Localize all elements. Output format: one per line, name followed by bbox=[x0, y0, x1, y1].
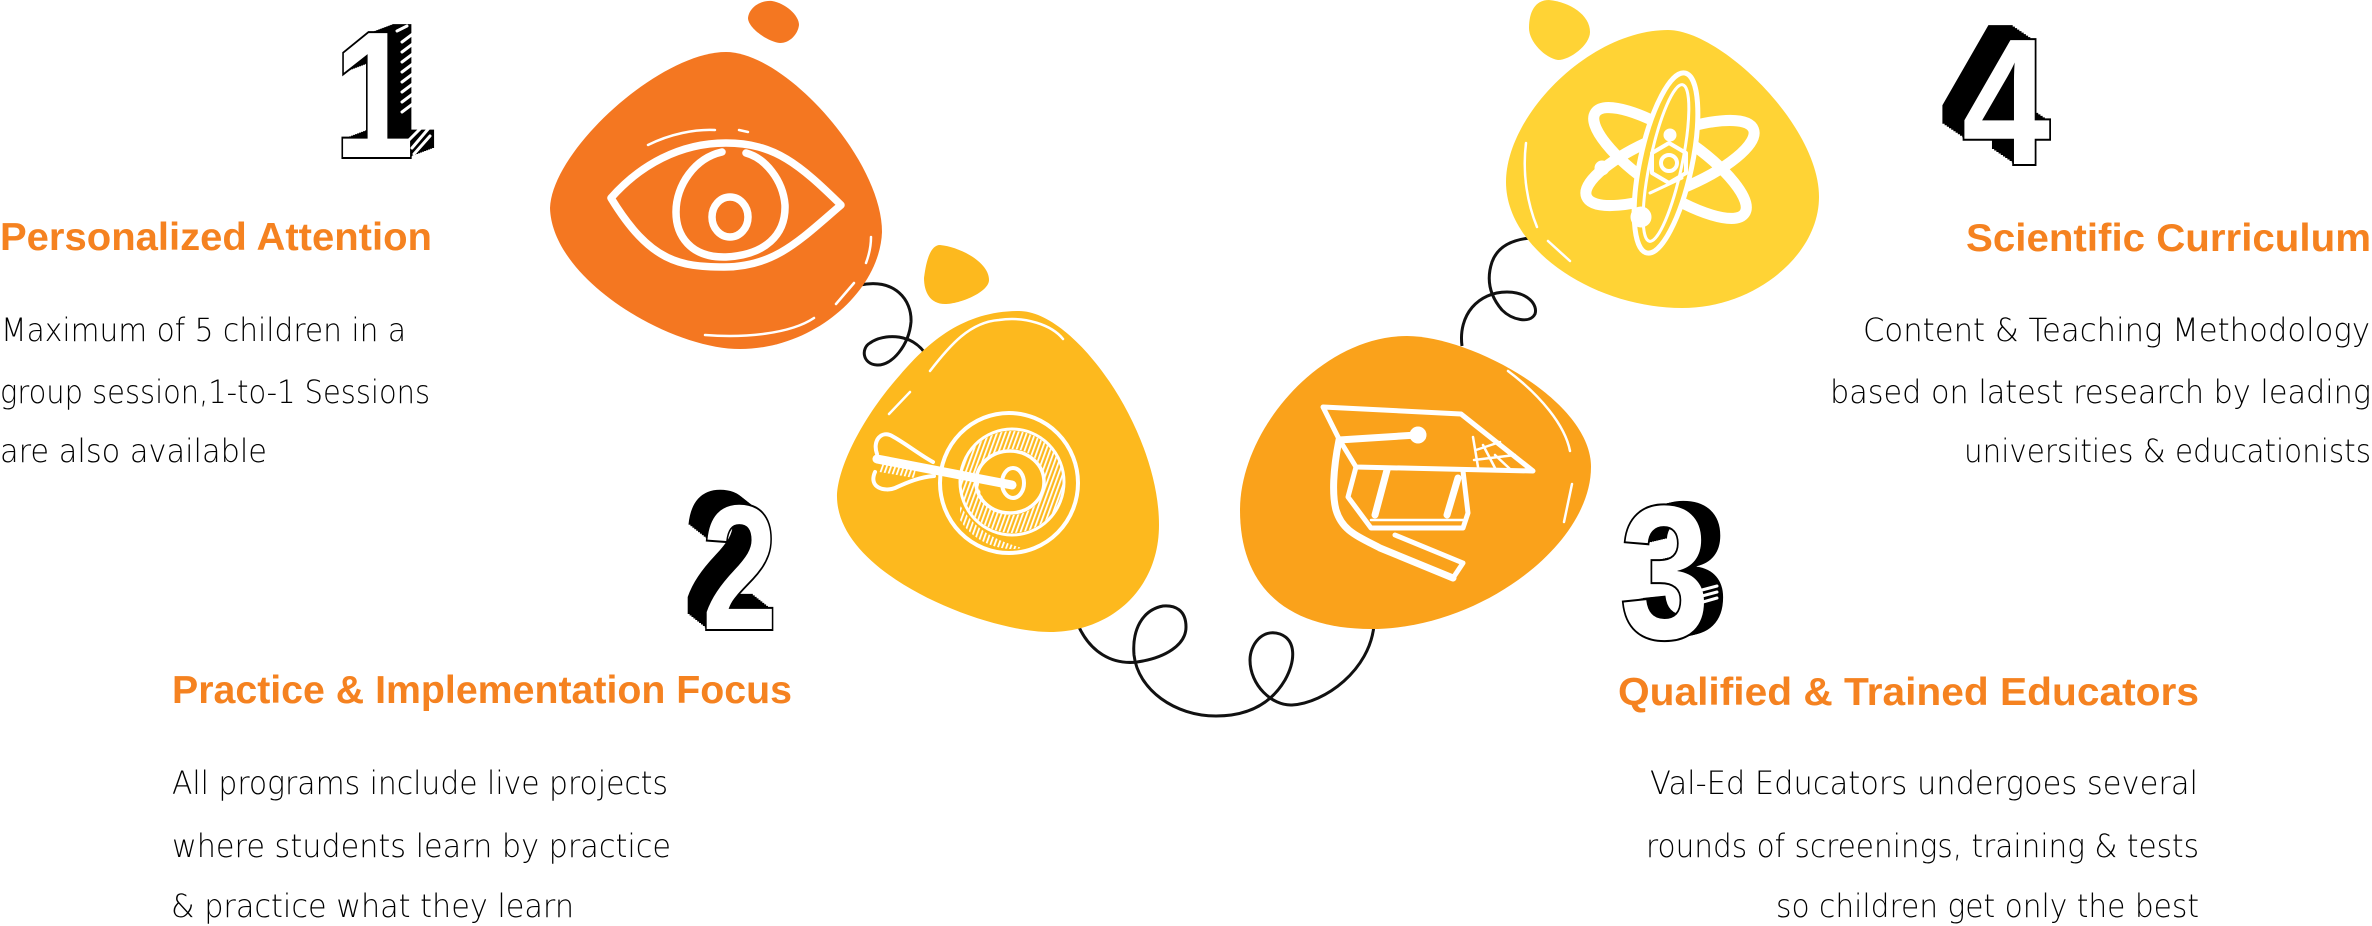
panel: scientific curriculum bbox=[1830, 217, 2371, 470]
body text bbox=[1830, 311, 2371, 470]
highlights bbox=[1508, 371, 1572, 522]
balloon 4: yellow with atom bbox=[1506, 0, 1819, 308]
deep amber blob bbox=[1240, 336, 1591, 629]
body text: & practice what they learn bbox=[171, 887, 574, 925]
body text bbox=[0, 311, 430, 470]
highlights bbox=[889, 319, 1063, 414]
icon: target with arrow bbox=[873, 413, 1078, 553]
body text: are also available bbox=[0, 432, 267, 470]
body text: so children get only the best bbox=[1776, 887, 2199, 925]
amber blob bbox=[837, 311, 1159, 632]
panel: qualified and trained educators bbox=[1618, 671, 2199, 925]
connector: balloon 3 to balloon 4 bbox=[1461, 238, 1536, 346]
heading: Qualified & Trained Educators bbox=[1618, 671, 2199, 714]
number 1: 1 bbox=[334, 0, 414, 196]
heading: Scientific Curriculum bbox=[1966, 217, 2371, 260]
small yellow blob bbox=[1529, 0, 1590, 60]
panel: practice and implementation focus bbox=[171, 669, 792, 925]
icon: atom bbox=[1576, 68, 1764, 258]
body text: rounds of screenings, training & tests bbox=[1646, 827, 2199, 865]
highlights bbox=[648, 130, 871, 336]
number 3: 3 bbox=[1620, 467, 1710, 679]
number 2: 2 bbox=[702, 468, 777, 667]
small orange blob bbox=[748, 1, 799, 43]
heading: Personalized Attention bbox=[0, 216, 432, 259]
balloon 3: deep amber with graduation cap bbox=[1240, 336, 1591, 629]
icon: eye bbox=[611, 143, 841, 267]
number 4: 4 bbox=[1962, 2, 2050, 203]
small amber blob bbox=[924, 245, 989, 304]
connector: orange to yellow balloon bbox=[860, 284, 930, 365]
heading: Practice & Implementation Focus bbox=[172, 669, 792, 712]
body text: Maximum of 5 children in a bbox=[1, 311, 406, 349]
yellow blob bbox=[1506, 30, 1819, 308]
balloon 2: amber with target bbox=[837, 245, 1159, 632]
connector: balloon 2 to balloon 3 bbox=[1078, 606, 1374, 716]
body text bbox=[1646, 764, 2199, 925]
body text: Val-Ed Educators undergoes several bbox=[1650, 764, 2198, 802]
balloon 1: orange with eye bbox=[550, 1, 882, 349]
body text bbox=[171, 764, 671, 925]
body text: All programs include live projects bbox=[172, 764, 668, 802]
body text: where students learn by practice bbox=[172, 827, 671, 865]
panel: personalized attention bbox=[0, 216, 432, 470]
icon: graduation cap bbox=[1323, 407, 1533, 578]
orange blob bbox=[550, 52, 882, 349]
highlights bbox=[1525, 143, 1570, 261]
body text: group session,1-to-1 Sessions bbox=[0, 373, 430, 411]
